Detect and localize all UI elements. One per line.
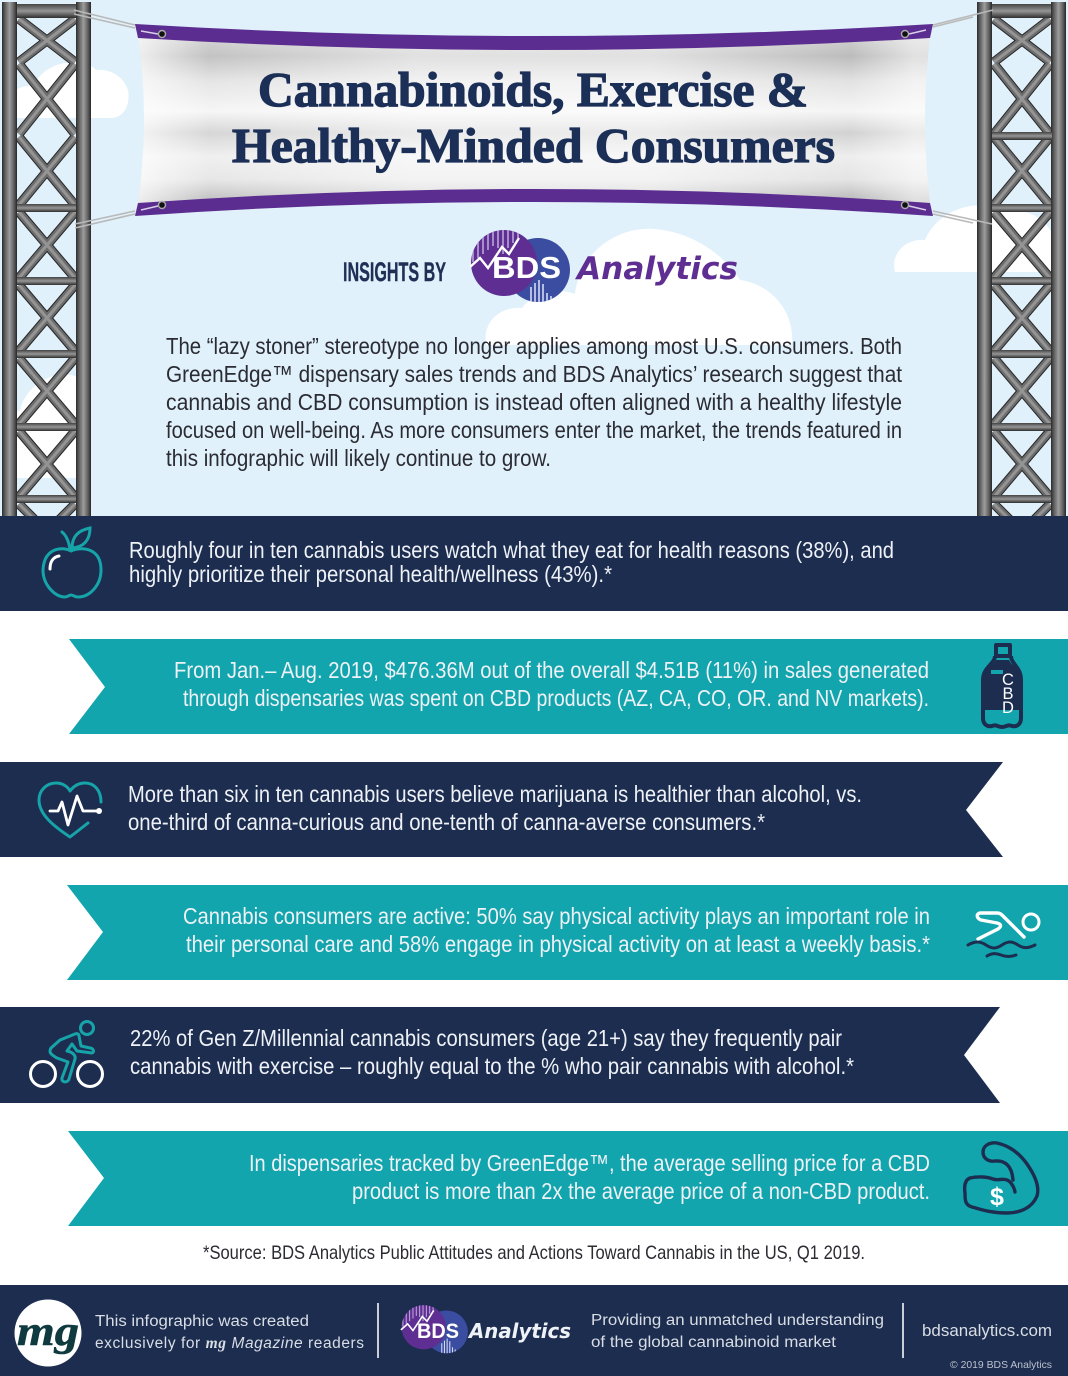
footer tagline: of the global cannabinoid market [591,1334,837,1351]
icon: CBD bottle: D [1002,699,1014,717]
footer BDS logo [401,1304,571,1353]
title: Healthy-Minded Consumers [232,118,835,173]
intro paragraph: focused on well-being. As more consumers enter the market, the trends featured in [166,417,902,443]
band 2 text: through dispensaries was spent on CBD products (AZ, CA, CO, OR. and NV markets). [183,685,929,711]
icon: flexed arm with dollar sign: $ [990,1183,1004,1211]
intro paragraph: The “lazy stoner” stereotype no longer applies among most U.S. consumers. Both [166,333,902,359]
banner ropes [74,10,993,228]
right truss tower [977,2,1066,530]
banner purple top hem [135,24,933,50]
footer BDS logo: Analytics [467,1319,571,1343]
band 4 text: their personal care and 58% engage in physical activity on at least a weekly basis.* [186,931,930,957]
band 1: health and diet [0,516,1068,611]
band 4: physical activity [67,885,1068,980]
title [232,62,835,173]
copyright: © 2019 BDS Analytics [950,1359,1052,1371]
banner purple bottom hem [135,189,933,216]
footer BDS logo: BDS [417,1320,459,1343]
clouds [5,62,1058,478]
band 5: exercise pairing [0,1007,1000,1103]
band 2: CBD sales [69,639,1068,734]
icon: CBD bottle: B [1002,685,1014,703]
footer [0,1285,1068,1376]
BDS Analytics logo [470,229,738,302]
band 6: CBD price [68,1131,1068,1226]
footer credit text: This infographic was created [95,1313,309,1330]
icon: swimmer [968,913,1039,956]
band 1 text: Roughly four in ten cannabis users watch what they eat for health reasons (38%), and [129,537,894,563]
sky background [0,0,1068,516]
band 5 text: cannabis with exercise – roughly equal to the % who pair cannabis with alcohol.* [130,1053,854,1079]
banner cloth [138,36,930,203]
band 4 text: Cannabis consumers are active: 50% say physical activity plays an important role in [183,903,930,929]
intro paragraph: cannabis and CBD consumption is instead often aligned with a healthy lifestyle [166,389,902,415]
icon: CBD bottle [983,645,1021,727]
icon: flexed arm with dollar sign [965,1143,1038,1213]
icon: CBD bottle: C [1002,671,1014,689]
band 6 text [249,1150,930,1204]
insights by label: INSIGHTS BY [343,257,446,287]
icon: heart with pulse [39,783,102,837]
intro paragraph: this infographic will likely continue to grow. [166,445,551,471]
icon: apple [43,528,101,597]
icon: cyclist [30,1022,102,1086]
source note: *Source: BDS Analytics Public Attitudes and Actions Toward Cannabis in the US, Q1 2019. [203,1242,865,1264]
band 1 text: highly prioritize their personal health/wellness (43%).* [129,561,612,587]
mg magazine logo [14,1300,82,1366]
band 2 text [174,657,929,711]
footer website: bdsanalytics.com [922,1321,1052,1340]
left truss tower [2,2,91,530]
band 4 text [183,903,930,957]
band 3 text: More than six in ten cannabis users believe marijuana is healthier than alcohol, vs. [128,781,862,807]
band 3 text: one-third of canna-curious and one-tenth of canna-averse consumers.* [128,809,765,835]
band 3 text [128,781,862,835]
footer credit text [95,1313,364,1352]
footer credit text: exclusively for mg Magazine readers [95,1335,364,1352]
footer tagline [591,1312,884,1351]
title: Cannabinoids, Exercise & [258,62,808,117]
grommets [158,30,908,208]
intro paragraph: GreenEdge™ dispensary sales trends and BDS Analytics’ research suggest that [166,361,902,387]
band 3: marijuana vs alcohol [0,762,1003,857]
BDS Analytics logo: Analytics [574,251,738,287]
band 5 text: 22% of Gen Z/Millennial cannabis consumers (age 21+) say they frequently pair [130,1025,842,1051]
band 6 text: In dispensaries tracked by GreenEdge™, the average selling price for a CBD [249,1150,930,1176]
band 6 text: product is more than 2x the average price of a non-CBD product. [352,1178,930,1204]
band 1 text [129,537,894,587]
BDS Analytics logo: BDS [492,250,561,285]
intro paragraph [166,333,902,471]
banner [135,24,933,216]
footer tagline: Providing an unmatched understanding [591,1312,884,1329]
band 5 text [130,1025,854,1079]
band 2 text: From Jan.– Aug. 2019, $476.36M out of the overall $4.51B (11%) in sales generated [174,657,929,683]
mg magazine logo: mg [17,1309,79,1355]
